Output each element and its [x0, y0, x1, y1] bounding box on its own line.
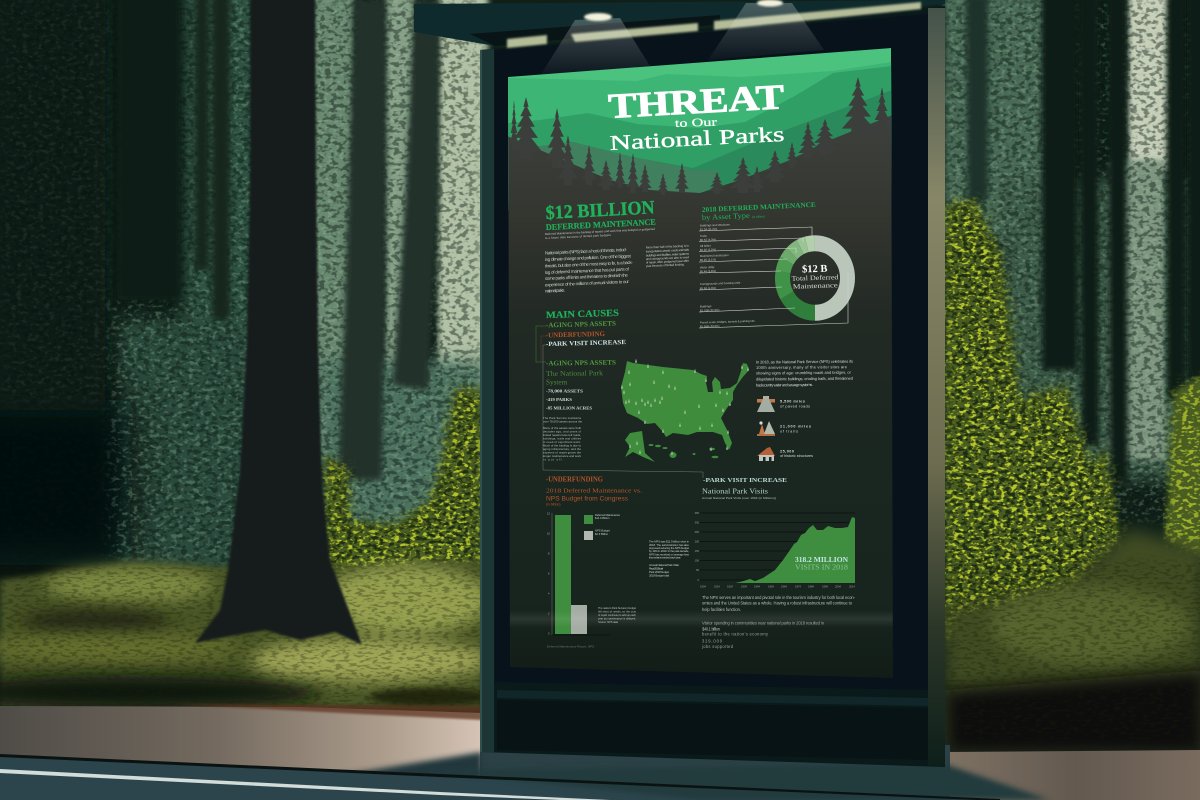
title: National Parks [609, 122, 785, 155]
bar chart: 12 [547, 512, 550, 516]
bar chart: 10 [547, 532, 550, 536]
asset type labels: $0.60 (5.0%) [700, 286, 716, 290]
tourism paragraph: omies and the United States as a whole. Having a robust infrastructure will continue to [702, 600, 853, 606]
intro paragraph: national parks. [545, 288, 565, 293]
small asset notes: decades ago, and years of [543, 430, 581, 434]
title: THREAT [607, 77, 785, 126]
section: deferred maintenance by asset type: 2018 DEFERRED MAINTENANCE [702, 201, 816, 214]
bar chart legend: $11.9 Billion [595, 516, 610, 520]
stat: paved roads: 5,500 miles [780, 400, 805, 404]
visitor spending text: 329,000 [702, 638, 723, 644]
area chart: 250 [695, 530, 700, 534]
tree silhouette [510, 77, 903, 195]
section: aging NPS assets [543, 359, 853, 462]
shelter canopy [414, 0, 945, 48]
side note: More than half of the backlog is in [646, 244, 689, 249]
chart note: Source: NPS data [598, 620, 618, 624]
asset type labels: All Other [700, 244, 711, 248]
area chart: 2004 [835, 584, 841, 588]
yellow-green foliage left [325, 388, 482, 640]
small asset notes: Many of the assets were built [543, 426, 581, 430]
stat: trails [780, 425, 811, 432]
park system stats [546, 390, 592, 410]
section: underfunding: 2018 Deferred Maintenance vs. [546, 488, 643, 494]
park system stats: -78,000 ASSETS [546, 390, 583, 394]
asset type labels: Buildings [700, 304, 712, 308]
ceiling lamps [540, 0, 824, 76]
tourism paragraph: The NPS serves an important and pivotal role in the tourism industry for both local econ- [702, 595, 856, 600]
visitor spending text: Visitor spending in communities near national parks in 2018 resulted in [702, 620, 825, 626]
asset type labels: $2.75B (22.9%) [700, 308, 720, 312]
bar chart: 0 [548, 632, 550, 636]
area chart: 100 [695, 558, 700, 562]
forest light zones right [945, 0, 1200, 520]
area chart: 1914 [714, 584, 720, 588]
poster dark body [500, 112, 900, 690]
section: $12 billion deferred maintenance: $12 BILLION [545, 197, 655, 224]
section: main causes [536, 308, 703, 478]
small asset notes [543, 416, 582, 462]
grass left [0, 560, 490, 709]
glass glare band [510, 614, 893, 624]
donut center label: Maintenance [793, 282, 838, 291]
asset type labels: Water utility [700, 265, 715, 269]
tourism paragraph [702, 595, 856, 612]
budget note: proposed reducing the NPS budget [649, 546, 689, 550]
pavement and road [0, 704, 1200, 800]
bar chart legend: NPS Budget [595, 528, 610, 532]
area chart: 1984 [808, 584, 814, 588]
area chart: 200 [695, 540, 700, 544]
intro paragraph: some parks off limits and threatens to diminish the [545, 273, 628, 281]
area chart: 1964 [781, 584, 787, 588]
infrastructure paragraph: showing signs of age: crumbling roads and bridges, or [756, 370, 852, 375]
background tree trunks left [118, 0, 440, 480]
infrastructure paragraph: backcountry water and sewage systems. [756, 382, 813, 387]
asset type labels: Maintained landscapes [700, 253, 729, 258]
side note: and campgrounds are also in need [646, 255, 689, 261]
bar chart: 8 [548, 552, 550, 556]
section: underfunding: Deferred Maintenance Report, NPS [547, 644, 594, 648]
main tree trunk [195, 0, 362, 645]
area chart: 1924 [727, 584, 733, 588]
bar chart: 4 [548, 592, 550, 596]
area chart: 300 [695, 520, 700, 524]
budget note: Annual National Park Visits [649, 563, 680, 567]
section: underfunding: -UNDERFUNDING [546, 476, 604, 484]
forest light zones left [0, 0, 488, 580]
grass right [945, 530, 1200, 755]
chart note: The nation's Park Service's budget [598, 606, 636, 610]
visitor spending text: $40.1 billion [702, 626, 721, 632]
section: park visit increase: -PARK VISIT INCREASE [703, 477, 787, 484]
area chart: 150 [695, 549, 700, 553]
side note: of repair, often postponed year after [646, 259, 689, 264]
asset type leader lines [699, 227, 848, 328]
small asset notes: in need of significant work. [543, 440, 581, 444]
small asset notes: longer maintenance and work [543, 454, 582, 458]
area chart: 1934 [741, 584, 747, 588]
area chart: 1994 [822, 584, 828, 588]
infrastructure paragraph [756, 359, 853, 387]
budget note: than what is needed each year. [649, 556, 681, 560]
asset type labels: $0.46 (3.8%) [700, 269, 716, 273]
intro paragraph: experience of the millions of annual visitors to our [545, 279, 629, 287]
intro paragraph: National parks (NPS) face a host of threats, includ- [545, 247, 627, 255]
chart note: of repair continues to add up each [598, 613, 636, 617]
area chart: 50 [696, 568, 700, 572]
chart note: year as maintenance is delayed. [598, 616, 636, 620]
section: main causes: -PARK VISIT INCREASE [546, 339, 626, 348]
area chart [695, 511, 855, 588]
sky gap strips [507, 2, 921, 48]
asset type labels [700, 222, 755, 328]
budget note: 2018. The administration has also [649, 543, 689, 547]
area chart: 1944 [754, 584, 760, 588]
bar chart [547, 512, 610, 636]
park system stats: -85 MILLION ACRES [546, 406, 592, 410]
section: deferred maintenance by asset type: (in billion) [752, 214, 765, 219]
poster header hills [500, 40, 900, 210]
stat: trails: of trails [780, 430, 798, 434]
small asset notes: The Park Service maintains [543, 416, 582, 420]
connector lines [536, 326, 703, 478]
yellow-green foliage right [945, 200, 1200, 640]
section: $12 billion deferred maintenance: DEFERRED MAINTENANCE [546, 218, 656, 232]
stat: trails: 21,000 miles [780, 424, 811, 428]
area chart: 1974 [795, 584, 801, 588]
visitor spending text: benefit to the nation's economy [702, 632, 769, 636]
intro paragraph: ing climate change and pollution. One of the biggest [545, 253, 632, 262]
intro paragraph: threats, but also one of the most easy to fix, is a back- [545, 260, 633, 268]
side note: transportation assets: roads and trails [646, 248, 690, 253]
bar chart: 2 [548, 612, 550, 616]
chart note [598, 607, 636, 623]
section: deferred maintenance by asset type: by Asset Type [702, 211, 751, 222]
stat: paved roads [780, 400, 810, 408]
side note [646, 244, 690, 268]
asset type labels: Buildings and structures [700, 222, 730, 227]
infrastructure paragraph: dilapidated historic buildings, eroding trails, and threatened [756, 376, 853, 381]
budget note: Park 2018 budget [649, 570, 669, 574]
icon: trails [757, 421, 775, 436]
section: park visit increase: National Park Visits [702, 488, 768, 496]
bar chart legend: Deferred Maintenance [595, 513, 620, 517]
asset type labels: $5.95B (49.6%) [700, 324, 720, 328]
section: park visit increase: Annual National Park Visits (over 1904 (in Millions)) [702, 496, 776, 500]
section: underfunding: (in billion) [546, 502, 561, 506]
infrastructure paragraph: In 2018, as the National Park Service (NPS) celebrates its [756, 359, 853, 364]
tourism paragraph: help facilities function. [702, 607, 741, 612]
US map [621, 359, 749, 462]
budget note: by 13% in 2019. In the past decade, [649, 549, 689, 553]
shelter frame [480, 6, 945, 767]
bar chart legend: $2.9 Billion [595, 532, 609, 536]
asset type labels: Campgrounds and housing units [700, 281, 741, 286]
small asset notes: expense of repair grows the [543, 450, 581, 454]
visitor spending text: jobs supported [701, 644, 734, 649]
area chart: 2014 [849, 584, 855, 588]
section: $12 billion deferred maintenance: Deferred Maintenance is the backlog of repairs and work that was delayed or postponed [545, 227, 655, 236]
infrastructure paragraph: 100th anniversary, many of the visitor sites are [756, 364, 848, 370]
stat: historic buildings [780, 450, 813, 457]
park system stats: -419 PARKS [546, 398, 572, 402]
section: $12 billion deferred maintenance [545, 197, 690, 293]
intro paragraph: log of deferred maintenance that has put parts of [545, 266, 630, 275]
small asset notes: aging infrastructure, and the [543, 447, 581, 451]
small asset notes: Much of the backlog is due to [543, 444, 581, 448]
section: aging NPS assets: The National Park [546, 369, 603, 378]
section: deferred maintenance by asset type [699, 201, 861, 328]
donut chart [775, 235, 855, 321]
area chart: 1954 [768, 584, 774, 588]
visits callout: 318.2 MILLION [795, 556, 849, 564]
area chart: 350 [695, 511, 700, 515]
icon: paved road [757, 396, 775, 412]
budget note: NPS has received on average less [649, 552, 690, 556]
bar chart legend [584, 513, 620, 540]
small asset notes: buildings, trails and utilities [543, 436, 582, 440]
section: $12 billion deferred maintenance: to a future date because of limited park budgets [545, 233, 612, 240]
bar chart: 6 [548, 572, 550, 576]
small asset notes: limited repairs have left roads, [543, 433, 581, 437]
chart note: fell short of needs, so the cost [598, 610, 636, 614]
visits callout: VISITS IN 2018 [795, 564, 849, 572]
visitor spending text [701, 620, 825, 649]
small asset notes: over 78,000 assets across the [543, 420, 582, 424]
budget note [649, 540, 690, 578]
asset type labels: $0.52 (4.3%) [700, 237, 716, 242]
budget note: 2018 Budget total [649, 574, 669, 578]
stat: paved roads: of paved roads [780, 404, 810, 408]
section: main causes: -UNDERFUNDING [546, 330, 606, 339]
donut center label: $12 B [802, 264, 828, 275]
visits callout [795, 557, 848, 570]
donut center label [792, 264, 838, 289]
section: park visit increase [695, 477, 856, 649]
asset type labels: Trails [700, 234, 707, 238]
background tree trunks right [966, 0, 1200, 490]
donut center label: Total Deferred [791, 274, 839, 283]
poster [500, 40, 903, 690]
budget note: Fiscal 2018 total [649, 566, 663, 570]
area chart: 0 [698, 578, 700, 582]
title: to Our [675, 117, 717, 130]
section: main causes: MAIN CAUSES [546, 308, 619, 321]
stat: historic buildings: 25,000 [780, 450, 794, 454]
asset type labels: $0.25 (2.1%) [700, 257, 716, 262]
small asset notes: is put off. [543, 458, 563, 462]
section: aging NPS assets: -AGING NPS ASSETS [546, 359, 616, 367]
section: main causes: -AGING NPS ASSETS [546, 320, 616, 329]
asset type labels: Paved roads, bridges, tunnels & parking lots [700, 319, 755, 324]
park tree markers [621, 359, 749, 455]
asset type labels: $1.34 (11.2%) [700, 227, 717, 231]
side note: buildings and facilities, water systems [646, 252, 690, 257]
budget note: The NPS was $11.9 billion short in [649, 540, 689, 544]
section: underfunding [546, 476, 690, 648]
area chart: 1904 [700, 584, 706, 588]
stat: historic buildings: of historic structures [780, 454, 813, 458]
side note: year because of limited funding [646, 262, 684, 268]
section: aging NPS assets: System [546, 378, 568, 386]
icon: historic buildings [757, 447, 775, 461]
intro paragraph [545, 247, 633, 293]
title [608, 84, 784, 150]
section: underfunding: NPS Budget from Congress [546, 496, 629, 502]
asset type labels: $0.26 (2.2%) [700, 247, 716, 252]
